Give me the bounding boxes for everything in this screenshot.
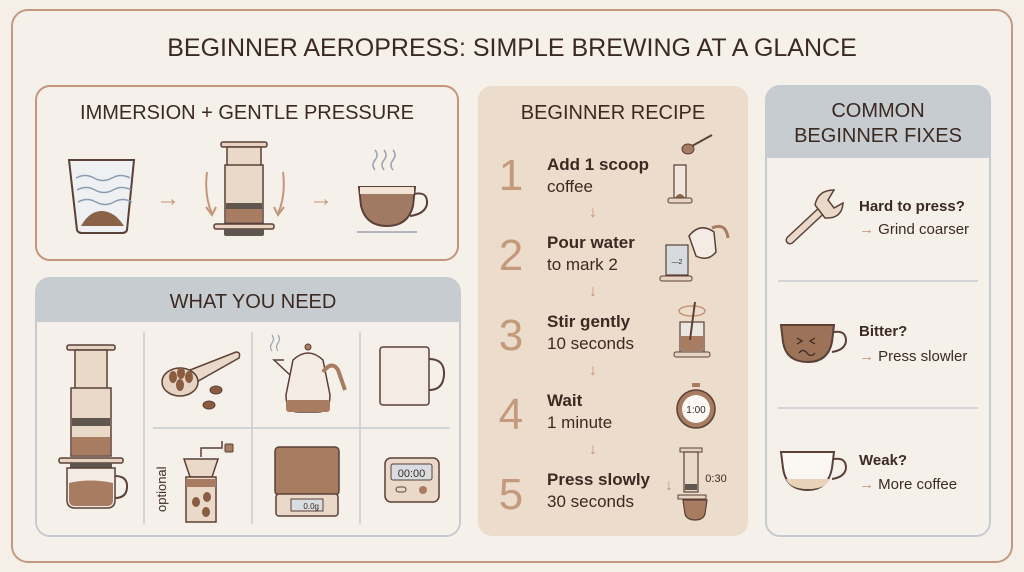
step 5: ↓ <box>665 477 673 494</box>
step 2: to mark 2 <box>547 255 618 274</box>
icon: scale <box>275 447 339 516</box>
fix: bitter <box>781 323 967 365</box>
fix: weak <box>781 452 957 493</box>
arrow: ↓ <box>589 204 597 221</box>
step 4: 1 minute <box>547 413 612 432</box>
step 3: 3 <box>499 311 523 360</box>
step 4: 1:00 <box>686 405 706 416</box>
step 3: Stir gently <box>547 312 631 331</box>
icon: kettle <box>270 335 345 412</box>
step 5: 30 seconds <box>547 492 634 511</box>
panel: common fixes: BEGINNER FIXES <box>794 125 962 147</box>
step 1: coffee <box>547 177 593 196</box>
step 2 <box>499 226 728 281</box>
step 1: 1 <box>499 151 523 200</box>
step 2: 2 <box>499 231 523 280</box>
step 1 <box>499 135 712 203</box>
step 5: Press slowly <box>547 470 651 489</box>
icon: aeropress pressing <box>206 142 284 236</box>
fix: weak: → More coffee <box>859 476 957 493</box>
icon: timer <box>385 458 439 502</box>
icon: mug <box>380 347 444 405</box>
step 5: 0:30 <box>705 473 727 485</box>
step 1: Add 1 scoop <box>547 155 649 174</box>
icon: scale: 0.0g <box>303 502 319 511</box>
arrow: → <box>309 185 333 212</box>
icon: aeropress on mug <box>59 345 127 508</box>
panel: immersion <box>36 86 458 260</box>
fix: hard to press: Hard to press? <box>859 198 965 215</box>
text: optional: optional <box>154 466 169 512</box>
step 5: 5 <box>499 470 523 519</box>
step 3: 10 seconds <box>547 334 634 353</box>
panel: common fixes <box>766 86 990 536</box>
title: BEGINNER AEROPRESS: SIMPLE BREWING AT A GLANCE <box>167 34 857 62</box>
step 5 <box>499 448 727 520</box>
arrow: ↓ <box>589 441 597 458</box>
icon: grinder <box>184 441 233 522</box>
icon: glass with water and grounds <box>69 160 134 233</box>
step 4 <box>499 383 715 439</box>
arrow: → <box>156 185 180 212</box>
heading: common fixes: COMMON <box>831 100 925 122</box>
icon: scoop with beans <box>162 352 240 409</box>
heading: immersion: IMMERSION + GENTLE PRESSURE <box>80 102 414 124</box>
fix: bitter: → Press slowler <box>859 348 967 365</box>
step 2: —2 <box>672 259 683 266</box>
icon: steaming cup <box>357 150 427 232</box>
step 4: 4 <box>499 390 523 439</box>
step 3 <box>499 302 710 360</box>
arrow: ↓ <box>589 283 597 300</box>
step 4: Wait <box>547 391 583 410</box>
arrow: ↓ <box>589 362 597 379</box>
panel: beginner recipe <box>478 86 748 536</box>
fix: hard to press <box>790 190 969 240</box>
fix: weak: Weak? <box>859 452 907 469</box>
heading: beginner recipe: BEGINNER RECIPE <box>521 102 705 124</box>
panel: what you need <box>36 278 460 536</box>
heading: what you need: WHAT YOU NEED <box>170 291 336 313</box>
fix: hard to press: → Grind coarser <box>859 221 969 238</box>
step 2: Pour water <box>547 233 635 252</box>
icon: timer: 00:00 <box>398 468 425 480</box>
fix: bitter: Bitter? <box>859 323 907 340</box>
